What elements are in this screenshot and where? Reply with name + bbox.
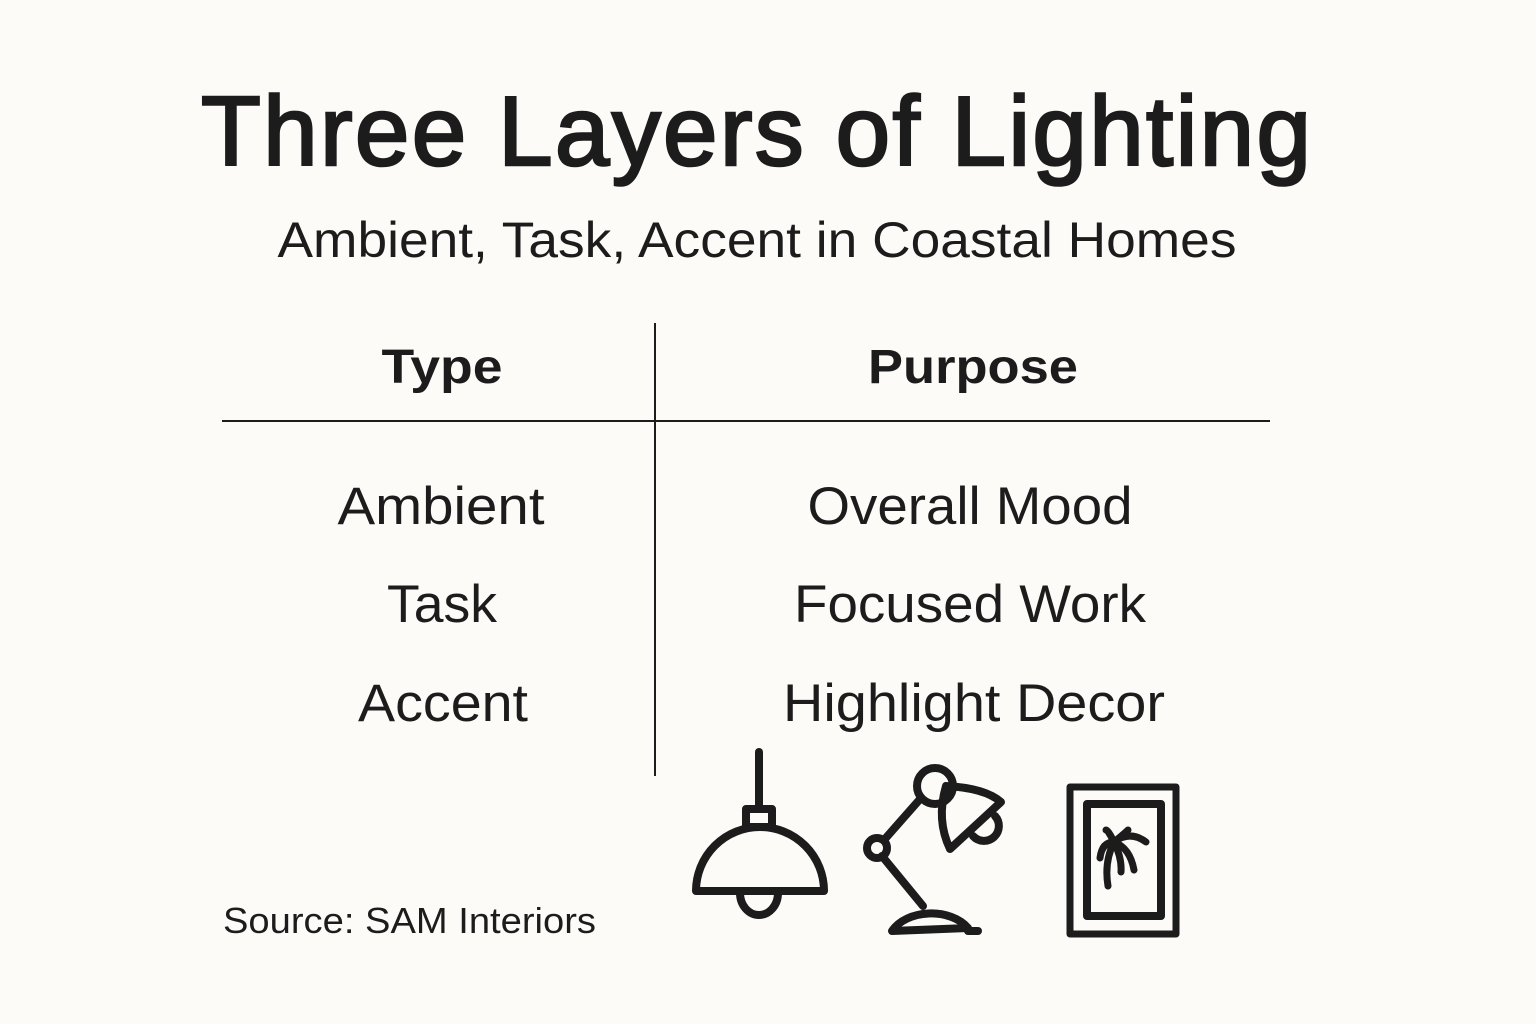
icon: pendant lamp bbox=[696, 752, 824, 915]
row: Task bbox=[387, 575, 1147, 634]
icon: framed palm picture bbox=[1070, 787, 1176, 934]
row: Ambient: Ambient bbox=[338, 477, 545, 536]
header: Purpose: Purpose bbox=[868, 341, 1078, 394]
source: Source: SAM Interiors bbox=[223, 900, 596, 941]
icon: desk lamp bbox=[867, 768, 1001, 931]
row: Accent: Highlight Decor bbox=[783, 674, 1165, 733]
row: Task: Focused Work bbox=[794, 575, 1147, 634]
row: Accent bbox=[358, 674, 1165, 733]
row: Ambient bbox=[338, 477, 1132, 536]
row: Accent: Accent bbox=[358, 674, 528, 733]
subtitle: Ambient, Task, Accent in Coastal Homes bbox=[278, 212, 1236, 268]
row: Ambient: Overall Mood bbox=[808, 477, 1132, 536]
row: Task: Task bbox=[387, 575, 497, 634]
header: Type: Type bbox=[382, 341, 502, 394]
title: Three Layers of Lighting bbox=[201, 76, 1311, 186]
table bbox=[222, 323, 1270, 776]
